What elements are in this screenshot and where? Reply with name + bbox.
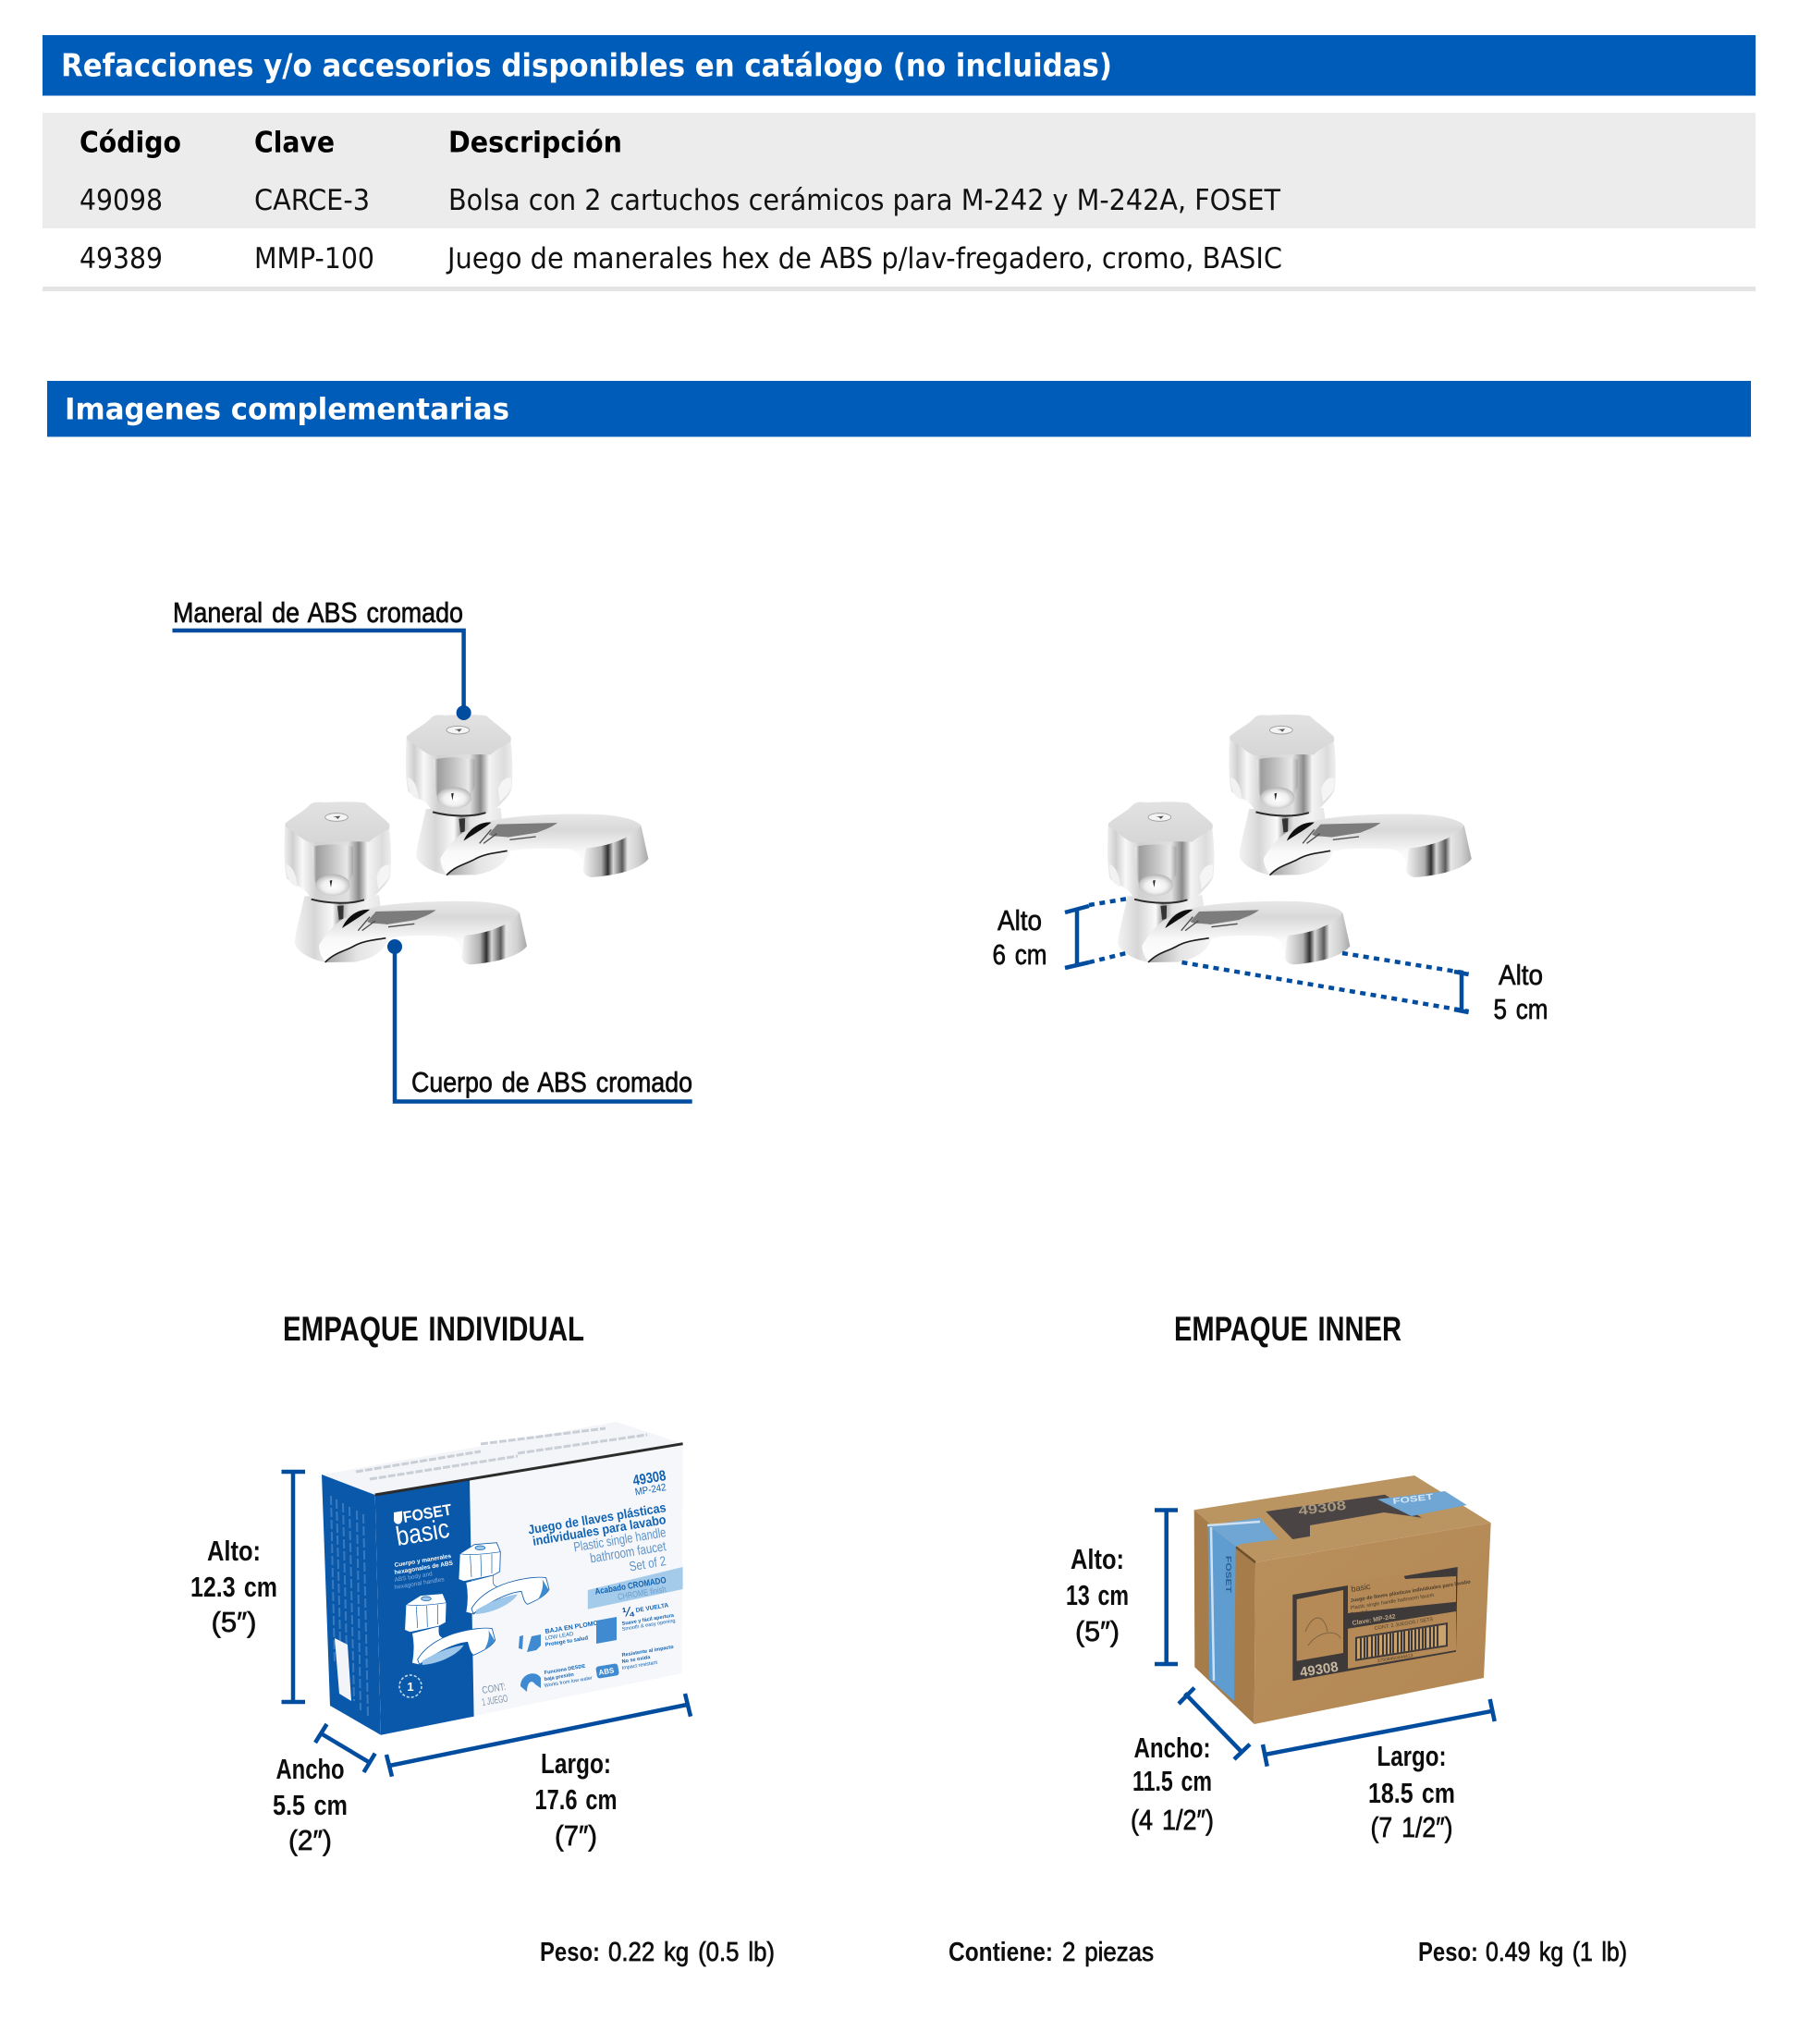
table header row: Código <box>80 126 181 159</box>
panel: individual package <box>190 1422 691 1856</box>
dimension: alto <box>1066 1510 1178 1664</box>
table row 49389: Juego de manerales hex de ABS p/lav-fregadero, cromo, BASIC <box>446 242 1282 275</box>
box feature icons and text: No se oxida <box>621 1655 652 1665</box>
box feature icons and text: ABS <box>598 1666 616 1677</box>
box feature icons and text: Works from low water <box>544 1675 594 1689</box>
text: peso individual: 0.22 kg (0.5 lb) <box>608 1938 775 1967</box>
box feature icons and text: ¼ <box>621 1603 635 1620</box>
table header row <box>80 126 622 159</box>
heading bar: refacciones: Refacciones y/o accesorios disponibles en catálogo (no incluidas) <box>61 48 1112 85</box>
box text: Acabado CROMADO <box>594 1575 667 1597</box>
table row 49389: 49389 <box>80 242 163 275</box>
box top face <box>323 1422 683 1495</box>
dimension: alto 5 cm: Alto <box>1499 959 1543 991</box>
dimension: ancho: 11.5 cm <box>1132 1765 1212 1797</box>
table row 49098: 49098 <box>80 184 163 217</box>
text: contiene: 2 piezas <box>1062 1938 1154 1967</box>
box feature icons and text: CONT: <box>482 1682 507 1696</box>
dimension: alto: (5″) <box>211 1606 257 1638</box>
table row 49098 <box>80 184 1281 217</box>
box feature icons and text: Funciona DESDE <box>544 1664 586 1676</box>
photo: cardboard box: Clave: MP-242 <box>1352 1614 1396 1627</box>
box feature icons and text: Protege tu salud <box>545 1635 589 1648</box>
photo: retail box <box>322 1422 683 1735</box>
dimension: largo: (7″) <box>555 1819 597 1852</box>
dimension: alto: (5″) <box>1075 1615 1120 1647</box>
box text: Juego de llaves plásticas <box>527 1499 667 1537</box>
dimension: largo <box>1263 1699 1495 1843</box>
box feature icons and text <box>482 1602 676 1708</box>
callout: maneral <box>172 596 471 720</box>
heading: empaque individual: EMPAQUE INDIVIDUAL <box>283 1310 584 1348</box>
panel: faucet with part callouts <box>172 596 692 1102</box>
dimension: alto 6 cm <box>993 899 1128 971</box>
heading bar: imagenes complementarias: Imagenes complementarias <box>65 392 509 427</box>
photo: cardboard box: CONT: 2 JUEGOS / SETS <box>1374 1617 1434 1632</box>
photo: faucet pair <box>1108 715 1472 964</box>
carton fold gap <box>1236 1547 1255 1562</box>
photo: cardboard box: Set of 2 <box>1350 1609 1368 1618</box>
table row 49098: Bolsa con 2 cartuchos cerámicos para M-242 y M-242A, FOSET <box>448 184 1281 217</box>
dimension: alto 5 cm <box>1181 953 1548 1025</box>
dimension: ancho <box>1131 1688 1250 1836</box>
photo: cardboard box: FOSET <box>1392 1492 1435 1506</box>
dimension: largo: 18.5 cm <box>1368 1777 1455 1809</box>
dimension: alto: Alto: <box>207 1535 261 1567</box>
box text: bathroom faucet <box>589 1539 667 1567</box>
text: peso inner: 0.49 kg (1 lb) <box>1486 1938 1627 1967</box>
table: refacciones <box>43 113 1756 291</box>
photo: cardboard box: 49308 <box>1299 1659 1340 1681</box>
photo: cardboard box: Juego de llaves plásticas individuales para lavabo <box>1350 1579 1472 1604</box>
photo: cardboard box: 37508450444413 <box>1377 1653 1414 1664</box>
carton front face <box>1254 1523 1491 1724</box>
text: contiene: Contiene: <box>948 1938 1053 1967</box>
photo: cardboard box: Plastic single handle bathroom faucet <box>1350 1593 1435 1611</box>
heading bar: refacciones <box>43 35 1756 96</box>
box brand: hexagonales de ABS <box>394 1560 454 1576</box>
dimension: alto: 12.3 cm <box>190 1571 277 1603</box>
box brand: ABS body and <box>394 1571 434 1584</box>
panel: faucet dimensions <box>993 715 1548 1025</box>
heading: empaque inner: EMPAQUE INNER <box>1174 1310 1401 1348</box>
callout: maneral: Maneral de ABS cromado <box>173 596 463 629</box>
dimension: largo: (7 1/2″) <box>1370 1811 1453 1843</box>
box feature icons and text: BAJA EN PLOMO <box>545 1620 599 1635</box>
photo: retail box: 1 <box>407 1680 414 1694</box>
carton blue tape <box>1208 1518 1279 1547</box>
box text: Plastic single handle <box>572 1525 667 1555</box>
dimension: alto: 13 cm <box>1066 1579 1129 1611</box>
dimension: alto: Alto: <box>1071 1543 1124 1575</box>
box feature icons and text: Suave y fácil apertura <box>621 1613 675 1627</box>
box feature icons and text: LOW LEAD <box>545 1632 575 1642</box>
box feature icons and text: DE VUELTA <box>635 1602 669 1614</box>
text: peso inner: Peso: <box>1418 1938 1478 1967</box>
photo: cardboard box: basic <box>1351 1582 1372 1594</box>
photo: cardboard box <box>1194 1475 1491 1724</box>
box brand: FOSET <box>402 1500 454 1526</box>
box text: 49308 <box>631 1468 667 1489</box>
panel: inner package <box>1066 1475 1495 1843</box>
table row 49098: CARCE-3 <box>254 184 370 217</box>
table row 49389 <box>80 242 1282 275</box>
dimension: ancho: (4 1/2″) <box>1131 1804 1214 1836</box>
dimension: ancho <box>273 1724 375 1856</box>
dimension: largo: Largo: <box>1377 1740 1446 1772</box>
photo: cardboard box: FOSET <box>1224 1556 1232 1593</box>
box brand: Cuerpo y manerales <box>394 1553 452 1569</box>
box feature icons and text: Resistente al impacto <box>621 1645 675 1658</box>
box feature icons and text: Smooth & easy opening <box>621 1619 676 1633</box>
callout: cuerpo: Cuerpo de ABS cromado <box>411 1066 692 1098</box>
dimension: largo: Largo: <box>541 1747 611 1780</box>
table header row: Clave <box>254 126 335 159</box>
box text: CHROME finish <box>617 1585 667 1603</box>
dimension: alto <box>190 1472 305 1702</box>
box text <box>527 1468 667 1603</box>
box band: acabado <box>588 1567 683 1609</box>
text: contiene <box>948 1938 1154 1967</box>
carton top label <box>1266 1495 1422 1539</box>
box text: individuales para lavabo <box>532 1512 667 1548</box>
table row 49389: MMP-100 <box>254 242 374 275</box>
photo: faucet pair <box>285 715 648 964</box>
text: peso individual <box>540 1938 775 1967</box>
text: peso inner <box>1418 1938 1627 1967</box>
dimension: ancho: 5.5 cm <box>273 1789 348 1821</box>
box side face <box>322 1475 381 1735</box>
box line drawing: faucets <box>405 1543 549 1665</box>
dimension: largo <box>386 1694 691 1852</box>
heading bar: imagenes complementarias <box>47 381 1751 436</box>
dimension: alto 5 cm: 5 cm <box>1494 993 1548 1025</box>
photo: cardboard box: 49308 <box>1297 1498 1347 1518</box>
carton side face <box>1194 1510 1255 1724</box>
box brand: hexagonal handles <box>394 1576 446 1591</box>
box text: Set of 2 <box>629 1554 667 1574</box>
callout: cuerpo <box>387 939 692 1102</box>
box front face <box>375 1444 683 1735</box>
table header row: Descripción <box>448 126 622 159</box>
box brand: basic <box>394 1514 451 1552</box>
dimension: ancho: Ancho <box>275 1753 344 1785</box>
dimension: ancho: (2″) <box>288 1824 332 1856</box>
dimension: alto 6 cm: Alto <box>997 904 1042 936</box>
carton top face <box>1194 1475 1491 1562</box>
box feature icons and text: baja presión <box>544 1672 575 1683</box>
box feature icons and text: Impact resistant <box>621 1660 658 1671</box>
text: peso individual: Peso: <box>540 1938 600 1967</box>
box text: MP-242 <box>634 1482 667 1499</box>
dimension: ancho: Ancho: <box>1133 1732 1211 1764</box>
dimension: largo: 17.6 cm <box>534 1783 618 1816</box>
dimension: alto 6 cm: 6 cm <box>993 938 1046 971</box>
box brand <box>394 1500 454 1591</box>
box feature icons and text: 1 JUEGO <box>482 1694 508 1708</box>
carton front label <box>1292 1567 1458 1681</box>
